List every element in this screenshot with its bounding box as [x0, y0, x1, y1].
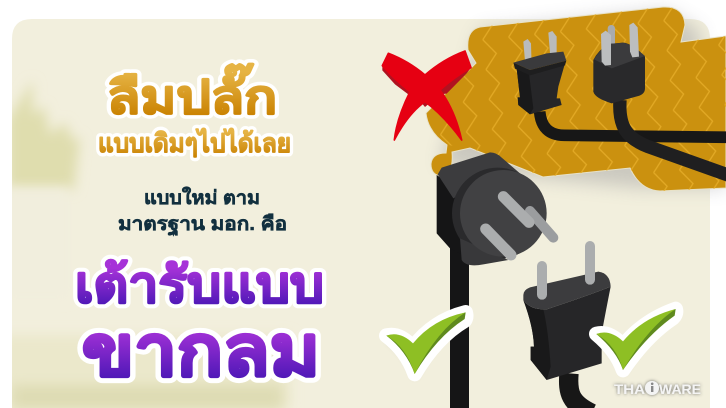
- watermark: Thaiware logo: [614, 381, 701, 397]
- text block: new standard line 1: แบบใหม่ ตาม: [144, 186, 260, 209]
- heading: round pin: ขากลม: [82, 312, 320, 390]
- icon: red cross: [382, 51, 471, 140]
- blurred background photo: [0, 80, 290, 408]
- subheading: old style: แบบเดิมๆไปได้เลย: [98, 127, 291, 158]
- heading: forget the old plug: ลืมปลั๊ก: [107, 63, 277, 123]
- panel: orange zigzag strip behind old plugs: [426, 7, 726, 191]
- heading: socket type: เต้ารับแบบ: [75, 257, 324, 313]
- cable: three pin plug: [620, 100, 726, 179]
- orange strip shadow: [440, 10, 726, 188]
- heading: round pin: ขากลม: [82, 312, 320, 390]
- icon: green check right: [596, 309, 676, 375]
- watermark: Thaiware logo: THA: [614, 381, 645, 397]
- plug: two flat pins: [513, 31, 566, 114]
- subheading: old style: แบบเดิมๆไปได้เลย: [98, 127, 291, 158]
- plug: three pins: [593, 23, 645, 103]
- icon: round pin plug and cable: [437, 152, 553, 408]
- watermark: Thaiware logo: WARE: [659, 381, 701, 397]
- icon: flat pin plug: [523, 246, 611, 408]
- cable: flat plug: [540, 112, 726, 137]
- heading: forget the old plug: ลืมปลั๊ก: [107, 63, 277, 123]
- text block: new standard line 2: มาตรฐาน มอก. คือ: [118, 213, 287, 237]
- heading: socket type: เต้ารับแบบ: [75, 257, 324, 313]
- icon: green check left: [386, 312, 466, 379]
- icon: old plugs and cables: [513, 23, 726, 179]
